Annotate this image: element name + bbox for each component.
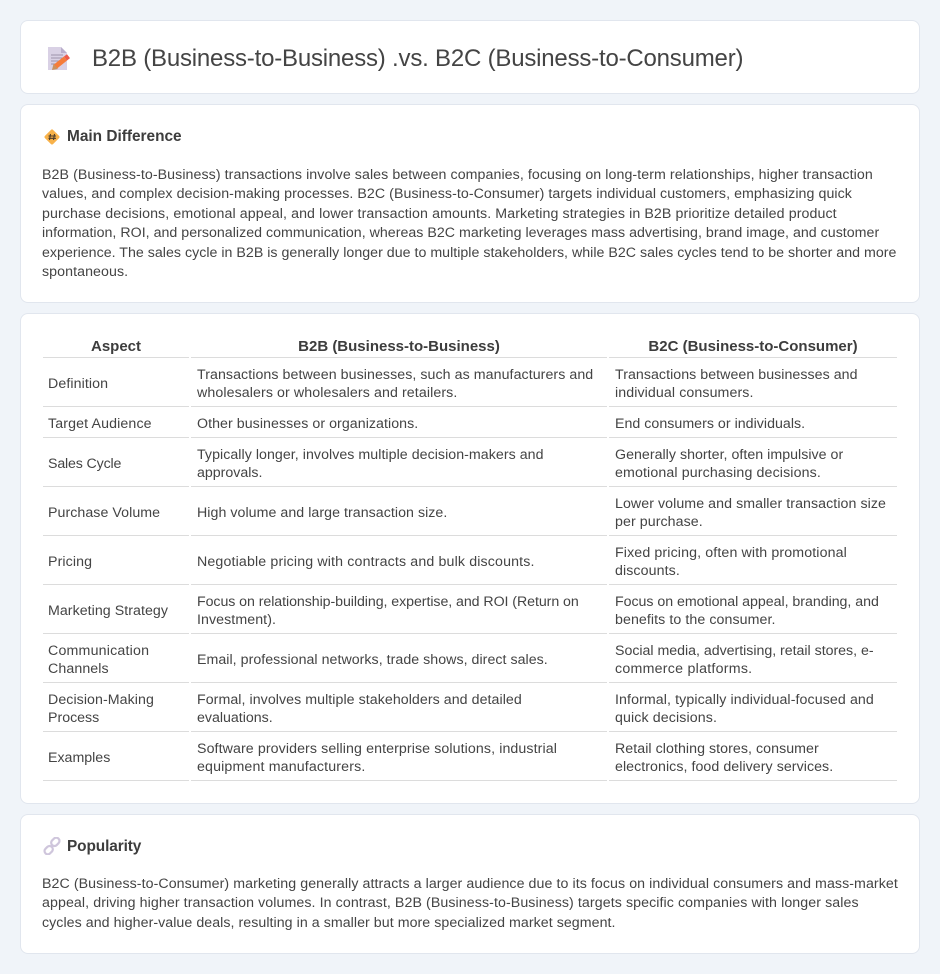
text: main difference paragraph: experience. The sales cycle in B2B is generally longer due to multiple stakeholders, while B2C sales cycles tend to be shorter and more: [42, 245, 896, 261]
heading: popularity: Popularity: [67, 838, 141, 855]
comparison table: Examples: [48, 750, 110, 766]
comparison table: benefits to the consumer.: [615, 612, 776, 628]
comparison table: emotional purchasing decisions.: [615, 465, 821, 481]
comparison table: quick decisions.: [615, 710, 717, 726]
comparison table: Retail clothing stores, consumer: [615, 741, 819, 757]
comparison table: individual consumers.: [615, 385, 754, 401]
comparison table: High volume and large transaction size.: [197, 505, 447, 521]
comparison table: Generally shorter, often impulsive or: [615, 447, 843, 463]
icon: chain link: [44, 837, 60, 855]
comparison table: Definition: [48, 376, 108, 392]
comparison table: Sales Cycle: [48, 456, 121, 472]
comparison table: Transactions between businesses and: [615, 367, 858, 383]
comparison table: Channels: [48, 661, 109, 677]
comparison table: Formal, involves multiple stakeholders and detailed: [197, 692, 522, 708]
comparison table: approvals.: [197, 465, 262, 481]
text: popularity paragraph: B2C (Business-to-Consumer) marketing generally attracts a larger audience due to its focus on individual consumers and mass-market: [42, 876, 898, 892]
comparison table: Purchase Volume: [48, 505, 160, 521]
panel: popularity: [20, 814, 920, 954]
comparison table: Focus on emotional appeal, branding, and: [615, 594, 879, 610]
text: main difference paragraph: spontaneous.: [42, 264, 128, 280]
comparison table: Transactions between businesses, such as manufacturers and: [197, 367, 593, 383]
panel: comparison table: [20, 313, 920, 804]
comparison table: B2C (Business-to-Consumer): [648, 338, 858, 355]
heading: main difference: Main Difference: [67, 128, 182, 145]
title: B2B (Business-to-Business) .vs. B2C (Business-to-Consumer): [92, 45, 743, 72]
comparison table: Focus on relationship-building, expertise, and ROI (Return on: [197, 594, 579, 610]
comparison table: Other businesses or organizations.: [197, 416, 418, 432]
comparison table: commerce platforms.: [615, 661, 752, 677]
text: main difference paragraph: values, and complex decision-making processes. B2C (Business-to-Consumer) targets individual customers, emphasizing quick: [42, 186, 852, 202]
comparison table: Typically longer, involves multiple decision-makers and: [197, 447, 544, 463]
text: popularity paragraph: appeal, driving higher transaction volumes. In contrast, B2B (Business-to-Business) targets specific companies with longer sales: [42, 895, 859, 911]
comparison table: Software providers selling enterprise solutions, industrial: [197, 741, 557, 757]
comparison table: wholesalers or wholesalers and retailers.: [197, 385, 457, 401]
text: main difference paragraph: purchase decisions, emotional appeal, and lower transaction amounts. Marketing strategies in B2B prioritize detailed product: [42, 206, 837, 222]
comparison table: Social media, advertising, retail stores, e-: [615, 643, 874, 659]
comparison table: Informal, typically individual-focused and: [615, 692, 874, 708]
comparison table: Lower volume and smaller transaction size: [615, 496, 886, 512]
comparison table: evaluations.: [197, 710, 273, 726]
comparison table: Marketing Strategy: [48, 603, 168, 619]
comparison table: Fixed pricing, often with promotional: [615, 545, 847, 561]
comparison table: Email, professional networks, trade shows, direct sales.: [197, 652, 548, 668]
comparison table: Target Audience: [48, 416, 152, 432]
comparison table: Pricing: [48, 554, 92, 570]
text: main difference paragraph: information, ROI, and personalized communication, whereas B2C marketing leverages mass advertising, brand image, and customer: [42, 225, 879, 241]
comparison table: per purchase.: [615, 514, 703, 530]
comparison table: Investment).: [197, 612, 276, 628]
comparison table: End consumers or individuals.: [615, 416, 805, 432]
text: popularity paragraph: cycles and higher-value deals, resulting in a smaller but more specialized market segment.: [42, 915, 616, 931]
panel: main difference: [20, 104, 920, 303]
comparison table: Process: [48, 710, 99, 726]
text: main difference paragraph: [42, 167, 896, 280]
comparison table: Communication: [48, 643, 149, 659]
comparison table: B2B (Business-to-Business): [298, 338, 500, 355]
comparison table: electronics, food delivery services.: [615, 759, 833, 775]
icon: diamond sign: [44, 129, 60, 145]
comparison table: Negotiable pricing with contracts and bulk discounts.: [197, 554, 535, 570]
icon: document with pencil: [48, 47, 70, 70]
text: main difference paragraph: B2B (Business-to-Business) transactions involve sales between companies, focusing on long-term relationships, higher transaction: [42, 167, 873, 183]
comparison table: Decision-Making: [48, 692, 154, 708]
comparison table: equipment manufacturers.: [197, 759, 365, 775]
comparison table: Aspect: [91, 338, 141, 355]
comparison table: discounts.: [615, 563, 680, 579]
panel: title: [20, 20, 920, 94]
text: popularity paragraph: [42, 876, 898, 931]
